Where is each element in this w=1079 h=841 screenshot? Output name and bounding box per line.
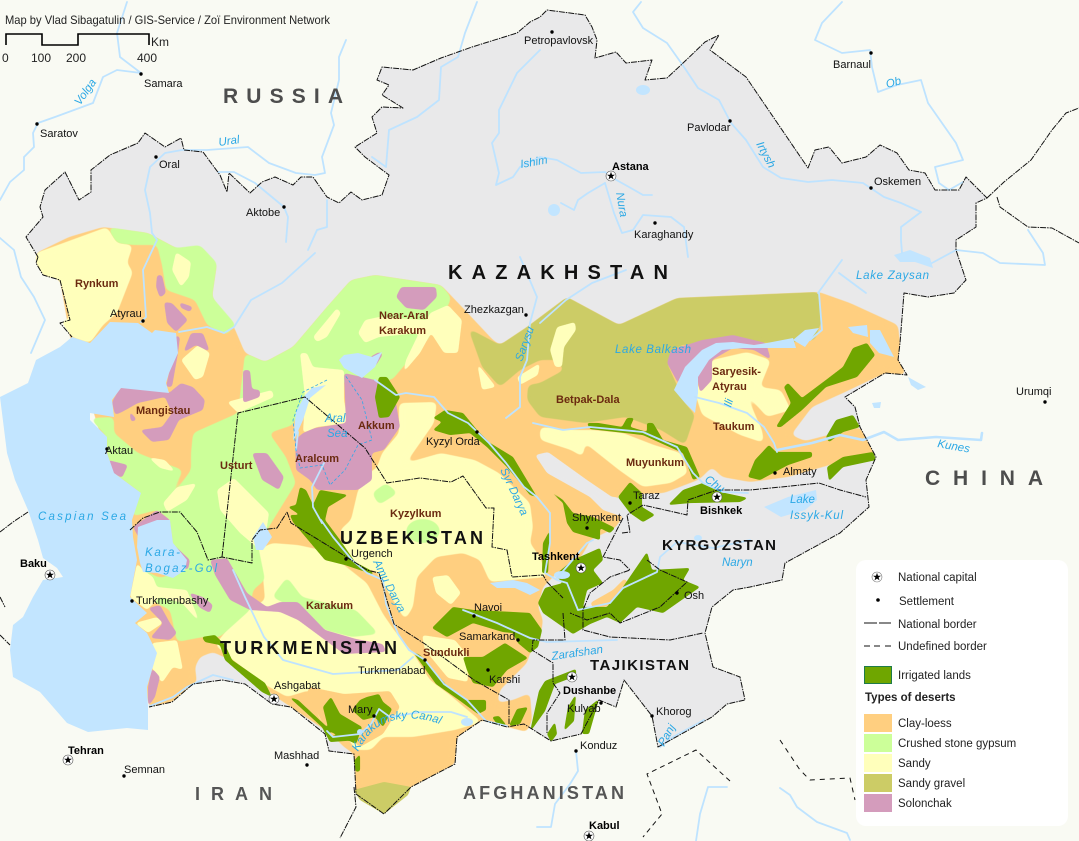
water labels: Sarysu xyxy=(514,325,537,363)
settlements: Navoi xyxy=(474,602,502,614)
settlements: Pavlodar xyxy=(687,122,731,134)
desert names: Akkum xyxy=(358,420,395,432)
water labels: Syr Darya xyxy=(497,466,530,518)
water labels: Volga xyxy=(73,77,99,108)
water labels: Lake Balkash xyxy=(615,344,691,356)
legend: sandy gravel: Sandy gravel xyxy=(898,778,965,790)
settlements: Mary xyxy=(348,704,373,716)
water labels: Chu xyxy=(702,474,727,496)
irrigated lands xyxy=(202,343,876,772)
settlements: Kyzyl Orda xyxy=(426,436,481,448)
credit line: Map by Vlad Sibagatulin / GIS-Service / Zoï Environment Network xyxy=(5,13,331,27)
water labels: Caspian Sea xyxy=(38,511,126,523)
water labels: Ob xyxy=(885,75,903,91)
settlements: Almaty xyxy=(783,466,817,478)
settlements: Petropavlovsk xyxy=(524,35,594,47)
water labels: Issyk-Kul xyxy=(790,510,843,522)
water labels: Naryn xyxy=(722,557,753,569)
country labels: RUSSIA xyxy=(223,85,343,108)
water labels: Lake Zaysan xyxy=(856,270,929,282)
water labels: Bogaz-Gol xyxy=(145,563,217,575)
sandy patch near the Zaysan basin xyxy=(790,320,820,340)
desert names: Kyzylkum xyxy=(390,508,442,520)
national capitals: Dushanbe xyxy=(563,685,616,697)
country labels: TAJIKISTAN xyxy=(590,657,689,674)
dried aral sea outline xyxy=(293,375,372,485)
water labels: Kunes xyxy=(936,438,971,456)
water labels: Ural xyxy=(218,134,241,149)
desert names: Atyrau xyxy=(712,381,747,393)
legend: national capital: National capital xyxy=(898,572,977,584)
country labels: AFGHANISTAN xyxy=(463,783,624,803)
desert names: Mangistau xyxy=(136,405,190,417)
desert: solonchak xyxy=(108,275,771,707)
legend: sandy gravel xyxy=(864,774,965,792)
settlements: Oral xyxy=(159,159,180,171)
national capitals: Baku xyxy=(20,558,47,570)
water labels xyxy=(38,75,971,764)
kara-bogaz-gol xyxy=(137,520,187,578)
desert: clay-loess base xyxy=(36,227,907,814)
settlements: Karaghandy xyxy=(634,229,694,241)
water labels: Sea xyxy=(327,428,347,440)
desert names: Saryesik- xyxy=(712,366,761,378)
national capitals: Astana xyxy=(612,161,650,173)
settlements: Semnan xyxy=(124,764,165,776)
aral sea xyxy=(339,352,382,378)
legend: national border xyxy=(864,619,977,631)
country labels: CHINA xyxy=(925,467,1043,490)
clay-loess patches over sand xyxy=(306,578,628,747)
other lakes xyxy=(793,328,819,347)
legend: national border: National border xyxy=(898,619,977,631)
settlements: Atyrau xyxy=(110,308,142,320)
water labels: Irtysh xyxy=(753,140,777,170)
scale bar xyxy=(2,34,169,65)
lake balkhash xyxy=(674,338,796,413)
legend: clay-loess xyxy=(864,714,952,732)
legend: clay-loess: Clay-loess xyxy=(898,718,952,730)
settlements: Mashhad xyxy=(274,750,319,762)
legend: settlement: Settlement xyxy=(899,596,955,608)
desert: crushed stone gypsum xyxy=(90,227,451,642)
desert: sandy small patches xyxy=(130,252,576,683)
legend: sandy: Sandy xyxy=(898,758,931,770)
scale bar: 0 xyxy=(2,51,9,65)
settlements: Khorog xyxy=(656,706,691,718)
national capitals: Bishkek xyxy=(700,505,743,517)
water labels: Amu Darya xyxy=(370,557,407,615)
water labels: Karakumsky Canal xyxy=(352,710,444,752)
scale bar: 200 xyxy=(66,51,86,65)
national capitals: Tehran xyxy=(68,745,104,757)
settlements: Karshi xyxy=(489,674,520,686)
legend: crushed stone gypsum xyxy=(864,734,1016,752)
settlements: Urgench xyxy=(351,548,393,560)
settlements: Shymkent xyxy=(572,512,621,524)
water labels: Ishim xyxy=(519,154,549,171)
water labels: Ili xyxy=(722,397,736,409)
desert names: Rynkum xyxy=(75,278,119,290)
settlements: Urumqi xyxy=(1016,386,1051,398)
settlements: Turkmenbashy xyxy=(136,595,209,607)
country labels: KYRGYZSTAN xyxy=(662,537,776,554)
grey strips among deserts xyxy=(535,452,630,517)
settlements: Zhezkazgan xyxy=(464,304,524,316)
legend: crushed stone gypsum: Crushed stone gypsum xyxy=(898,738,1016,750)
settlements: Ashgabat xyxy=(274,680,320,692)
national capitals: Kabul xyxy=(589,820,620,832)
legend: undefined border: Undefined border xyxy=(898,641,987,653)
country labels: TURKMENISTAN xyxy=(220,638,397,658)
settlements: Konduz xyxy=(580,740,617,752)
scale bar: 100 xyxy=(31,51,51,65)
settlements: Saratov xyxy=(40,128,78,140)
settlements: Samarkand xyxy=(459,631,515,643)
settlements: Osh xyxy=(684,590,704,602)
national capitals xyxy=(20,161,743,841)
national capitals: Tashkent xyxy=(532,551,580,563)
water labels: Zarafshan xyxy=(550,644,604,663)
desert names: Taukum xyxy=(713,421,755,433)
desert: sandy gravel xyxy=(468,292,822,445)
settlements: Oskemen xyxy=(874,176,921,188)
desert names: Sundukli xyxy=(423,647,469,659)
legend: irrigated lands xyxy=(864,666,971,684)
water labels: Lake xyxy=(790,494,815,506)
desert names: Usturt xyxy=(220,460,253,472)
water labels: Kara- xyxy=(145,547,180,559)
settlements: Kulyab xyxy=(567,703,601,715)
settlements: Barnaul xyxy=(833,59,871,71)
desert names: Karakum xyxy=(379,325,426,337)
legend: types of deserts heading: Types of deserts xyxy=(865,692,956,704)
water labels: Aral xyxy=(324,413,346,425)
water labels: Nura xyxy=(613,191,629,218)
water bodies xyxy=(0,85,933,735)
country labels xyxy=(195,85,1043,804)
desert names xyxy=(75,278,761,659)
legend: irrigated lands: Irrigated lands xyxy=(898,670,971,682)
settlements: Taraz xyxy=(633,490,660,502)
legend xyxy=(856,560,1068,826)
desert: sandy large areas xyxy=(36,227,791,750)
desert names: Karakum xyxy=(306,600,353,612)
country labels: IRAN xyxy=(195,784,272,804)
country labels: KAZAKHSTAN xyxy=(448,262,668,284)
caspian sea xyxy=(0,322,178,732)
legend: solonchak: Solonchak xyxy=(898,798,952,810)
legend: sandy xyxy=(864,754,931,772)
scale bar: Km xyxy=(151,35,169,49)
desert names: Near-Aral xyxy=(379,310,429,322)
desert names: Muyunkum xyxy=(626,457,684,469)
settlements: Aktau xyxy=(105,445,133,457)
legend: solonchak xyxy=(864,794,952,812)
scale bar: 400 xyxy=(137,51,157,65)
desert names: Aralcum xyxy=(295,453,339,465)
country labels: UZBEKISTAN xyxy=(340,528,483,548)
settlements: Aktobe xyxy=(246,207,280,219)
water labels: Panj xyxy=(656,722,678,748)
desert names: Betpak-Dala xyxy=(556,394,620,406)
settlements: Samara xyxy=(144,78,183,90)
legend: settlement xyxy=(876,596,955,608)
settlements: Turkmenabad xyxy=(358,665,425,677)
